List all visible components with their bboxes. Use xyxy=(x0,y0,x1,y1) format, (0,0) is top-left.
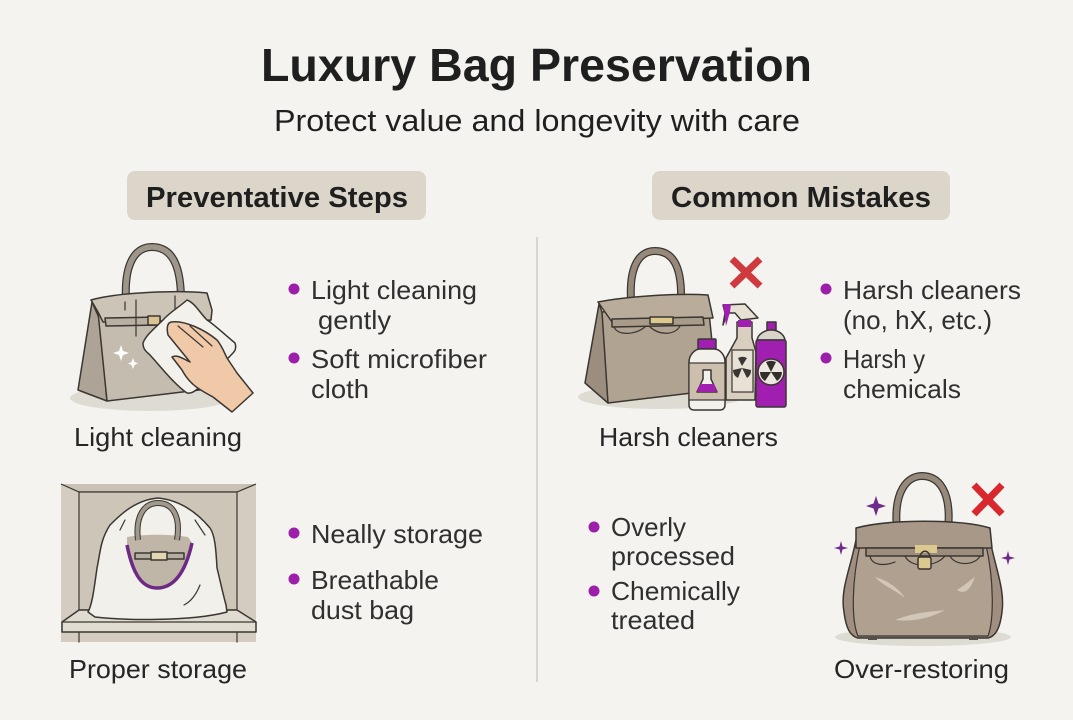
icon: over-glossed bag xyxy=(834,476,1015,646)
icon: bag being wiped with cloth xyxy=(70,247,253,412)
list: over-restoring mistakes xyxy=(588,512,740,635)
list: over-restoring mistakes: processed xyxy=(611,541,735,571)
list: over-restoring mistakes: Overly xyxy=(611,512,686,542)
icon: sparkles xyxy=(834,496,1015,565)
panel: harsh cleaners xyxy=(578,251,1021,452)
list: cleaning steps: cloth xyxy=(311,374,369,404)
list: harsh cleaner mistakes xyxy=(820,275,1021,404)
list: cleaning steps: Soft microfiber xyxy=(311,344,487,374)
list: cleaning steps: gently xyxy=(318,305,391,335)
list: harsh cleaner mistakes: chemicals xyxy=(843,374,961,404)
list: storage steps xyxy=(288,519,483,625)
heading: Preventative Steps: Preventative Steps xyxy=(146,182,408,214)
icon: spray bottle xyxy=(723,304,758,400)
heading: Preventative Steps xyxy=(127,171,426,220)
subtitle: Protect value and longevity with care xyxy=(274,103,800,138)
label: Proper storage: Proper storage xyxy=(69,654,247,684)
icon: bag with chemical bottles xyxy=(578,251,786,410)
list: storage steps: Breathable xyxy=(311,565,439,595)
heading: Common Mistakes: Common Mistakes xyxy=(671,182,931,214)
heading: Common Mistakes xyxy=(652,171,950,220)
icon: aerosol can xyxy=(756,322,786,407)
panel: light cleaning xyxy=(70,247,487,452)
list: cleaning steps xyxy=(288,275,487,404)
title: Luxury Bag Preservation xyxy=(261,39,812,91)
list: storage steps: Neally storage xyxy=(311,519,483,549)
icon: red X xyxy=(974,485,1002,514)
list: over-restoring mistakes: Chemically xyxy=(611,576,740,606)
list: harsh cleaner mistakes: Harsh cleaners xyxy=(843,275,1021,305)
icon: bag in dust bag on shelf xyxy=(61,484,256,642)
list: storage steps: dust bag xyxy=(311,595,414,625)
list: harsh cleaner mistakes: Harsh y xyxy=(843,344,925,374)
icon: red X xyxy=(732,259,760,286)
panel: proper storage xyxy=(61,484,483,684)
icon: chemical bottle xyxy=(689,339,725,410)
list: cleaning steps: Light cleaning xyxy=(311,275,477,305)
label: Harsh cleaners: Harsh cleaners xyxy=(599,422,778,452)
label: Light cleaning: Light cleaning xyxy=(74,422,242,452)
panel: over-restoring xyxy=(588,476,1015,684)
list: harsh cleaner mistakes: (no, hX, etc.) xyxy=(843,305,992,335)
label: Over-restoring: Over-restoring xyxy=(834,654,1009,684)
list: over-restoring mistakes: treated xyxy=(611,605,695,635)
